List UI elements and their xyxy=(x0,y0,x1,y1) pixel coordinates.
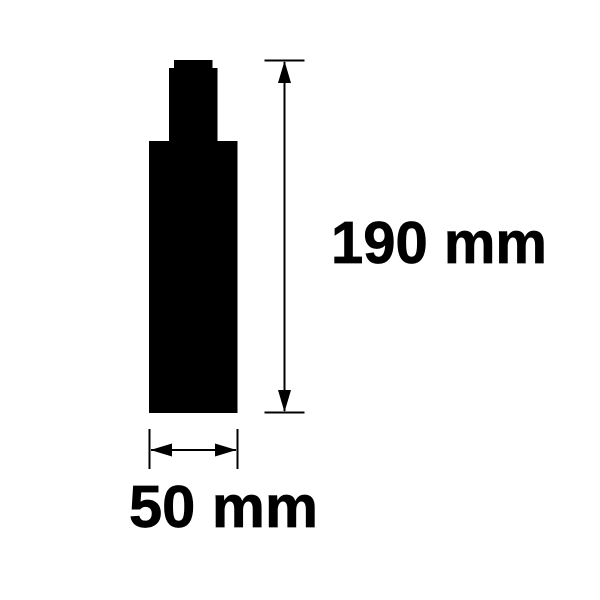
arrow: height dimension xyxy=(264,60,304,412)
label: width: 50 mm xyxy=(129,474,318,540)
arrow: width dimension xyxy=(150,429,238,469)
product silhouette xyxy=(149,60,238,413)
label: height: 190 mm xyxy=(331,210,547,276)
